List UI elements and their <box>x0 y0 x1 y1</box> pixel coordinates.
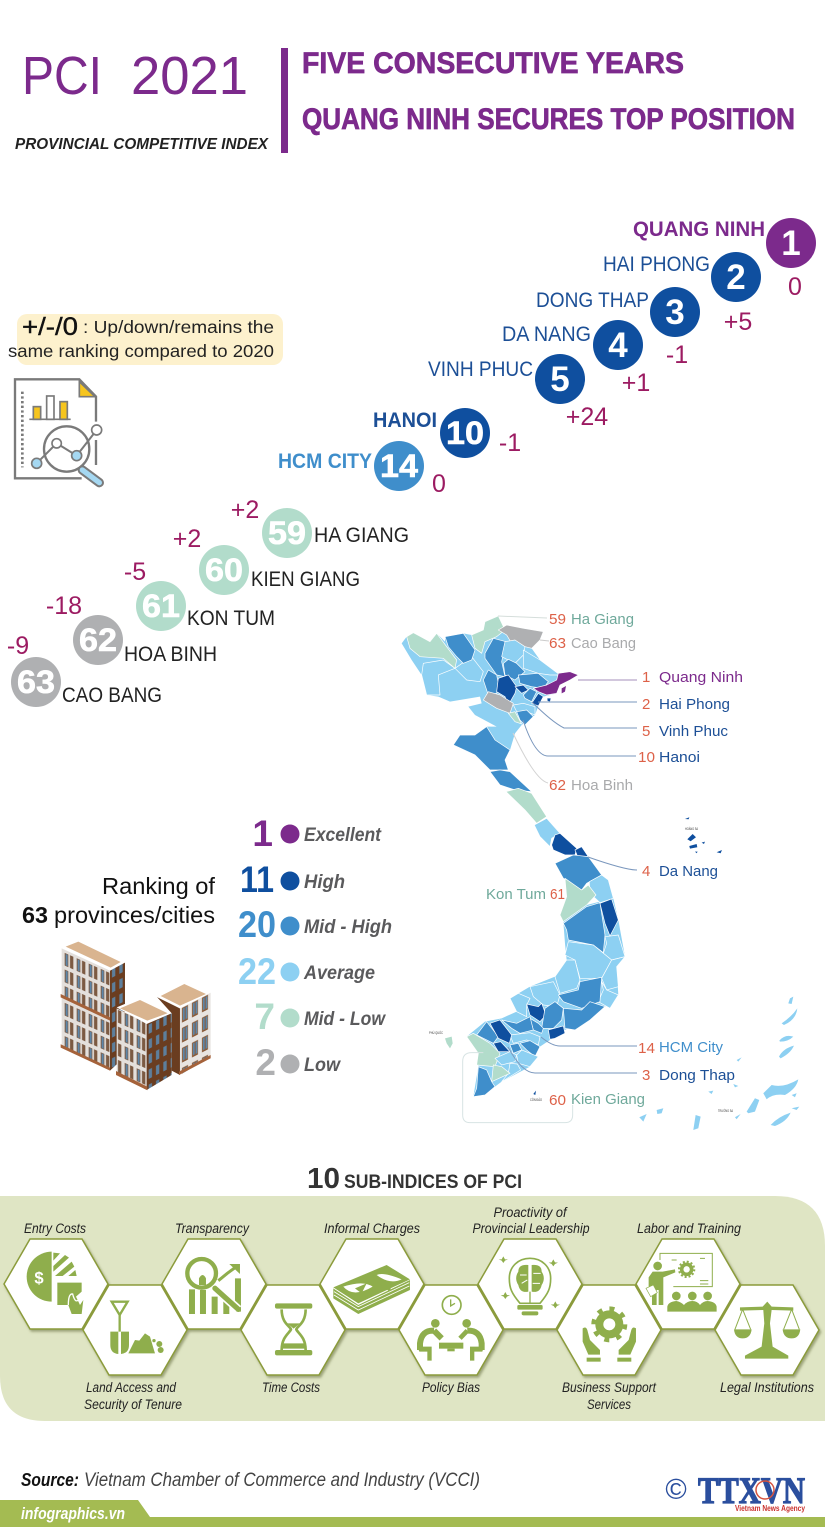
map labels: Ha Giang <box>571 611 634 628</box>
sub-index: Time Costs <box>262 1303 320 1395</box>
ranking row: Cao Bang 63: 63 <box>17 664 55 700</box>
ranking row: Hanoi 10: HANOI <box>373 409 437 432</box>
callout: ranking change note: +/-/0 <box>22 313 78 341</box>
source line: Vietnam Chamber of Commerce and Industry (VCCI) <box>84 1470 480 1491</box>
sub-index: Proactivity of Provincial Leadership: Proactivity of <box>494 1205 568 1220</box>
map labels: Da Nang <box>659 863 718 880</box>
callout: ranking change note: same ranking compared to 2020 <box>8 341 274 361</box>
map islands and inset box: CÔN ĐẢO <box>530 1097 542 1102</box>
sub-index: Time Costs: Time Costs <box>262 1380 320 1395</box>
map labels: Kien Giang <box>571 1091 645 1108</box>
map labels: Kon Tum <box>486 886 546 903</box>
ranking row: HCM City 14 <box>278 441 446 498</box>
map labels: 14 <box>638 1040 655 1057</box>
sub-index: Informal Charges <box>324 1221 420 1314</box>
map labels: Hai Phong <box>659 696 730 713</box>
sub-index: Entry Costs: $ <box>34 1268 44 1287</box>
sub-index: Legal Institutions: Legal Institutions <box>720 1380 814 1395</box>
map labels: 5 <box>642 723 650 740</box>
headline: FIVE CONSECUTIVE YEARS <box>302 47 684 80</box>
legend: rating scale: Excellent <box>304 825 382 846</box>
map labels: Cao Bang <box>571 635 636 652</box>
ranking row: Ha Giang 59 <box>231 496 409 558</box>
legend: rating scale: 7 <box>254 996 275 1037</box>
icon: buildings <box>61 940 211 1090</box>
ranking row: Hoa Binh 62 <box>46 592 217 666</box>
ranking row: Da Nang 4: 4 <box>608 326 628 365</box>
sub-index: Proactivity of Provincial Leadership: Provincial Leadership <box>472 1221 590 1236</box>
ranking row: Hanoi 10: -1 <box>499 429 521 457</box>
sub-index: Transparency: Transparency <box>175 1221 250 1236</box>
ranking row: Dong Thap 3 <box>536 287 700 369</box>
map islands and inset box: PHÚ QUỐC <box>429 1030 443 1035</box>
ranking row: Kon Tum 61: -5 <box>124 558 146 586</box>
map labels: 1 <box>642 669 650 686</box>
ranking row: Vinh Phuc 5: 5 <box>550 360 570 399</box>
icon: report with magnifier <box>15 379 102 483</box>
map labels: 61 <box>550 886 565 903</box>
ranking row: Hoa Binh 62: 62 <box>79 622 117 658</box>
ranking row: HCM City 14: 0 <box>432 470 446 498</box>
ranking row: Da Nang 4 <box>502 320 650 397</box>
sub-index: Proactivity of Provincial Leadership <box>472 1205 590 1315</box>
map labels: 60 <box>549 1092 566 1109</box>
ranking row: Dong Thap 3: -1 <box>666 341 688 369</box>
map labels: HCM City <box>659 1039 723 1056</box>
ranking row: Kien Giang 60: 60 <box>205 552 243 588</box>
ranking row: Kien Giang 60: KIEN GIANG <box>251 568 360 591</box>
map islands and inset box: TRƯỜNG SA <box>718 1108 733 1113</box>
sub-index: Legal Institutions <box>720 1302 814 1395</box>
map labels: 2 <box>642 696 650 713</box>
legend: rating scale: Mid - Low <box>304 1009 386 1030</box>
ranking row: Cao Bang 63 <box>7 632 162 707</box>
map labels: 59 <box>549 611 566 628</box>
ranking row: Cao Bang 63: CAO BANG <box>62 684 162 707</box>
logo: TTXVN Vietnam News Agency: TTXVN <box>698 1471 805 1512</box>
ranking row: Kon Tum 61: KON TUM <box>187 607 275 630</box>
ranking row: Hai Phong 2: +5 <box>724 308 752 336</box>
map labels: Dong Thap <box>659 1067 735 1084</box>
title block: PCI 2021: 2021 <box>131 46 248 106</box>
ranking row: Hoa Binh 62: HOA BINH <box>124 643 217 666</box>
heading: 10 sub-indices of PCI: SUB-INDICES OF PCI <box>344 1172 522 1193</box>
map islands and inset box: HOÀNG SA <box>685 827 698 831</box>
ranking row: HCM City 14: 14 <box>380 448 418 484</box>
legend: rating scale: 11 <box>240 859 274 900</box>
title block: PCI 2021: PROVINCIAL COMPETITIVE INDEX <box>15 136 269 153</box>
ranking row: Quang Ninh 1 <box>633 218 816 301</box>
map labels <box>486 611 743 1109</box>
ranking row: Vinh Phuc 5 <box>428 354 608 431</box>
ranking row: Dong Thap 3: DONG THAP <box>536 289 649 312</box>
callout: ranking change note <box>8 313 283 365</box>
ranking row: Vinh Phuc 5: VINH PHUC <box>428 358 533 381</box>
ranking row: HCM City 14: HCM CITY <box>278 450 372 473</box>
ranking row: Dong Thap 3: 3 <box>665 293 685 332</box>
heading: ranking of 63 provinces <box>22 873 215 928</box>
legend: rating scale: 22 <box>238 951 276 992</box>
sub-index: Business Support Services: Services <box>587 1397 631 1412</box>
ranking row: Da Nang 4: +1 <box>622 369 650 397</box>
logo: TTXVN Vietnam News Agency: © <box>665 1474 687 1506</box>
map labels: 62 <box>549 777 566 794</box>
sub-index: Policy Bias <box>417 1296 484 1395</box>
panel: sub-indices background <box>0 1196 825 1421</box>
ranking row: Hanoi 10: 10 <box>446 415 484 451</box>
sub-index: Labor and Training <box>637 1221 741 1312</box>
sub-index: Entry Costs: Entry Costs <box>24 1221 86 1236</box>
ranking row: Da Nang 4: DA NANG <box>502 323 591 346</box>
footer strip <box>0 1500 825 1527</box>
ranking row: Ha Giang 59: HA GIANG <box>314 524 409 547</box>
logo: TTXVN Vietnam News Agency <box>665 1471 805 1513</box>
ranking row: Kon Tum 61 <box>124 558 275 631</box>
ranking row: Hai Phong 2: HAI PHONG <box>603 253 710 276</box>
heading: ranking of 63 provinces: 63 <box>22 902 48 928</box>
ranking row: Hai Phong 2 <box>603 252 761 336</box>
map labels: 10 <box>638 749 655 766</box>
map labels: 3 <box>642 1067 650 1084</box>
headline <box>281 47 795 153</box>
legend: rating scale: High <box>304 872 345 893</box>
ranking row: Quang Ninh 1: QUANG NINH <box>633 218 765 241</box>
legend: rating scale: 20 <box>238 904 276 945</box>
ranking row: Kon Tum 61: 61 <box>142 588 180 624</box>
legend: rating scale: Low <box>304 1055 341 1076</box>
legend: rating scale <box>238 813 392 1083</box>
legend: rating scale: 1 <box>252 813 273 854</box>
map labels: 63 <box>549 635 566 652</box>
map labels: Quang Ninh <box>659 669 743 686</box>
heading: ranking of 63 provinces: Ranking of <box>102 873 215 899</box>
ranking row: Hai Phong 2: 2 <box>726 258 746 297</box>
legend: rating scale: 2 <box>255 1042 276 1083</box>
map labels: Hoa Binh <box>571 777 633 794</box>
ranking row: Cao Bang 63: -9 <box>7 632 29 660</box>
footer strip: infographics.vn <box>21 1504 125 1523</box>
sub-index hexagons <box>4 1239 819 1375</box>
map labels: Vinh Phuc <box>659 723 729 740</box>
map labels: 4 <box>642 863 650 880</box>
ranking row: Ha Giang 59: +2 <box>231 496 259 524</box>
title block: PCI 2021 <box>15 46 269 153</box>
ranking row: Kien Giang 60 <box>173 525 360 595</box>
map of Vietnam: south <box>467 875 625 1097</box>
ranking row: Kien Giang 60: +2 <box>173 525 201 553</box>
sub-index: Entry Costs <box>24 1221 86 1314</box>
sub-index: Informal Charges: Informal Charges <box>324 1221 420 1236</box>
sub-index: Business Support Services <box>562 1309 657 1412</box>
legend: rating scale: Average <box>303 963 375 984</box>
heading: ranking of 63 provinces: provinces/cities <box>54 902 215 928</box>
map of Vietnam: north <box>402 616 602 890</box>
map labels: Hanoi <box>659 749 700 766</box>
heading: 10 sub-indices of PCI: 10 <box>307 1163 340 1195</box>
sub-index: Labor and Training: Labor and Training <box>637 1221 741 1236</box>
source line: Source: <box>21 1470 79 1490</box>
sub-index: Policy Bias: Policy Bias <box>422 1380 480 1395</box>
ranking row: Ha Giang 59: 59 <box>268 515 306 551</box>
title block: PCI 2021: PCI <box>22 46 102 106</box>
ranking row: Quang Ninh 1: 0 <box>788 273 802 301</box>
sub-index: Business Support Services: Business Support <box>562 1380 657 1395</box>
callout: ranking change note: : Up/down/remains the <box>83 317 274 337</box>
logo: TTXVN Vietnam News Agency: Vietnam News Agency <box>735 1504 805 1513</box>
ranking row: Quang Ninh 1: 1 <box>781 224 801 263</box>
ranking row: Vinh Phuc 5: +24 <box>566 403 608 431</box>
legend: rating scale: Mid - High <box>304 917 392 938</box>
ranking row: Hoa Binh 62: -18 <box>46 592 82 620</box>
map leader lines <box>498 616 637 1073</box>
heading: 10 sub-indices of PCI <box>307 1163 522 1195</box>
sub-index: Land Access and Security of Tenure <box>84 1302 182 1412</box>
sub-index: Transparency <box>175 1221 250 1314</box>
sub-index: Land Access and Security of Tenure: Land Access and <box>86 1380 176 1395</box>
map islands and inset box <box>429 817 799 1130</box>
sub-index: Land Access and Security of Tenure: Security of Tenure <box>84 1397 182 1412</box>
ranking row: Hanoi 10 <box>373 408 521 458</box>
